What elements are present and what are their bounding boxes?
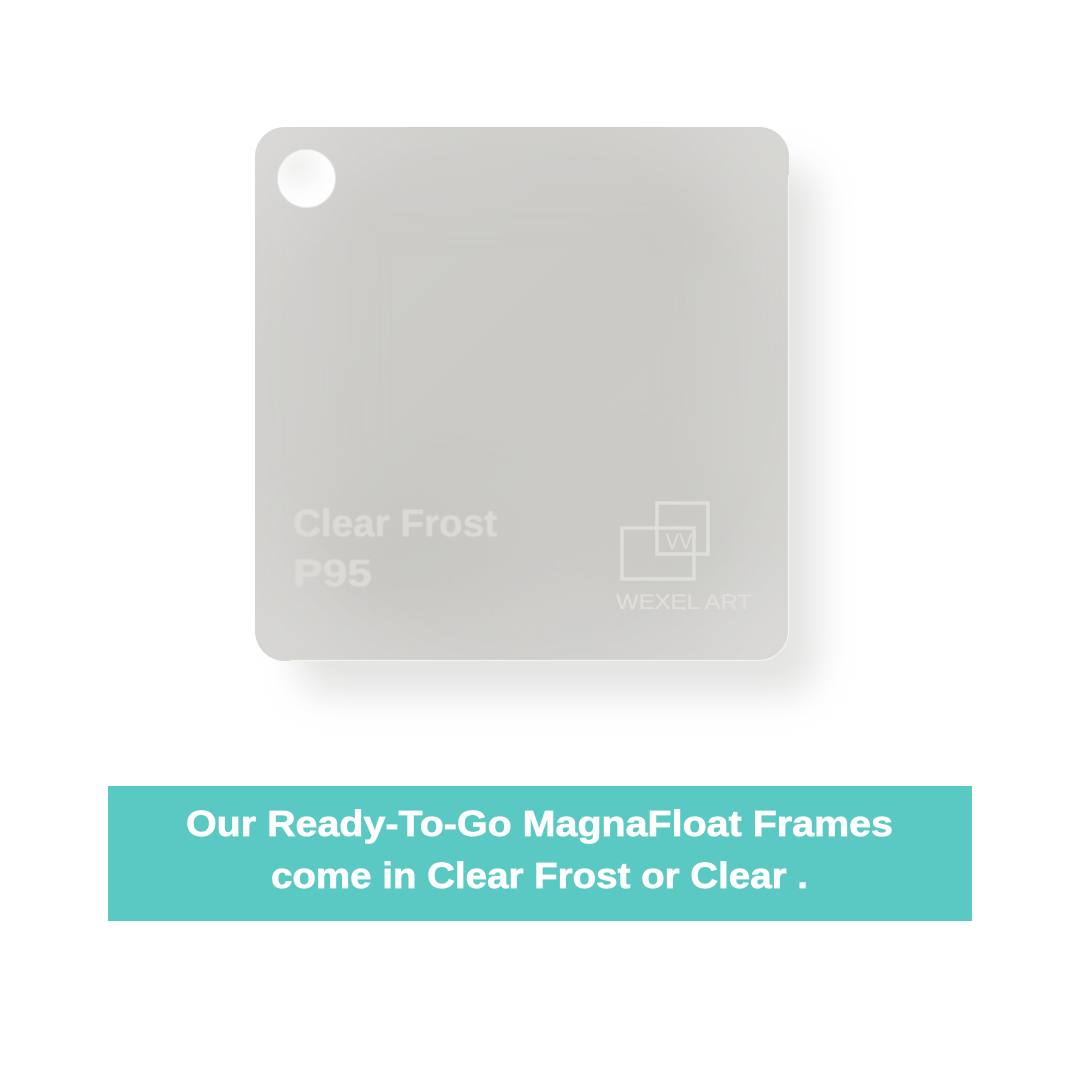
caption line one: Our Ready-To-Go MagnaFloat Frames <box>186 803 893 844</box>
engraved logo <box>622 503 708 579</box>
engraved product code: P95 <box>293 553 372 595</box>
engraved logo: VV <box>666 529 693 554</box>
caption line two: come in Clear Frost or Clear . <box>271 855 808 896</box>
caption banner <box>108 786 972 921</box>
plate frosted mottling <box>255 127 789 661</box>
plate body <box>255 127 789 661</box>
engraved product name: Clear Frost <box>293 503 497 545</box>
acrylic sample swatch with shadow <box>255 127 828 705</box>
drop shadow <box>296 165 818 695</box>
plate bright right and bottom rim <box>290 175 788 660</box>
engraved logo wordmark: WEXEL ART <box>616 591 752 614</box>
hanging hole <box>278 150 336 208</box>
plate edge sheen <box>255 127 789 661</box>
